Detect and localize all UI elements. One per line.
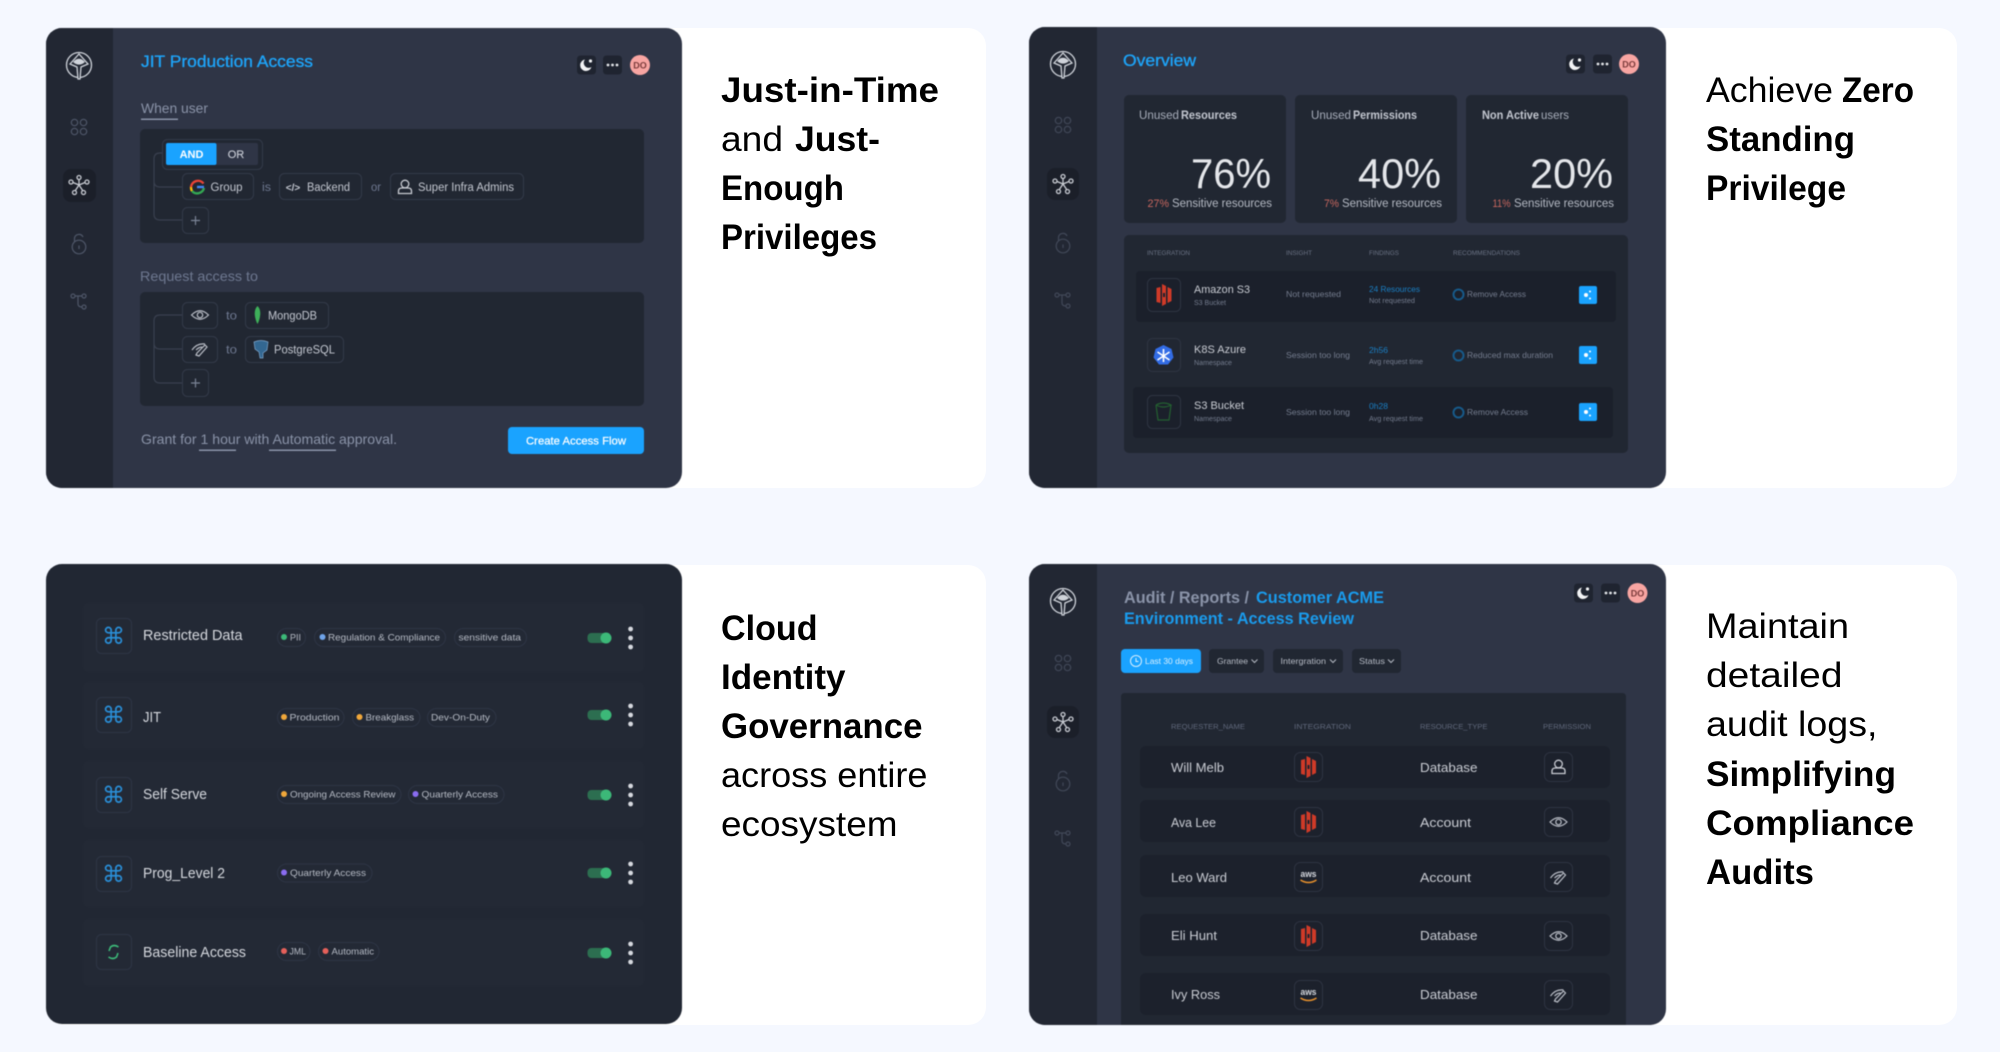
resource panel: MongoDB [268,310,317,322]
heading: JIT Production Access: JIT Production Access [141,53,313,71]
top actions [577,55,650,75]
top actions: DO [1631,588,1644,598]
stat card: unused resources: Sensitive resources [1172,198,1272,210]
row: S3 Bucket: S3 Bucket [1194,400,1244,412]
label: Request access to: Request access to [140,268,258,284]
row: Prog_Level 2 [83,840,644,907]
condition builder panel: is [262,182,271,194]
stat card: unused resources [1124,95,1286,223]
heading: Achieve Zero Standing Privilege [1706,71,1914,208]
sidebar icons [1047,588,1079,846]
row: K8S Azure: K8S Azure [1194,344,1246,356]
stat card: non active users: users [1541,110,1569,122]
heading: Maintain detailed audit logs, Simplifying Compliance Audits: Compliance [1706,804,1914,843]
row: JIT: Production [290,712,340,724]
condition builder panel: Group [210,182,242,194]
table header: INTEGRATION [1147,250,1190,257]
row: Ivy Ross: Ivy Ross [1171,987,1220,1002]
heading: Maintain detailed audit logs, Simplifying Compliance Audits: Maintain [1706,607,1849,646]
row: K8S Azure: Avg request time [1369,359,1423,366]
row: Baseline Access: Baseline Access [143,945,246,961]
condition builder panel: or [371,182,381,194]
heading: Just-in-Time and Just-Enough Privileges: Privileges [721,218,877,257]
row: Ivy Ross: Database [1420,987,1478,1002]
condition builder panel: </> [286,183,300,194]
stat card: unused resources: Unused [1139,110,1179,122]
row: S3 Bucket: Namespace [1194,416,1232,423]
row: Eli Hunt [1140,914,1610,956]
heading: Just-in-Time and Just-Enough Privileges: Just-in-Time [721,71,939,110]
row: Restricted Data: ⌘ [102,624,125,650]
white card [46,565,986,1025]
heading: Overview: Overview [1123,52,1196,70]
row: Prog_Level 2: Quarterly Access [290,868,366,879]
row: Amazon S3: S3 Bucket [1194,300,1226,307]
row: S3 Bucket: Avg request time [1369,416,1423,423]
row: Self Serve [83,761,644,828]
heading: Cloud Identity Governance across entire ecosystem: across entire [721,756,928,795]
heading: Cloud Identity Governance across entire ecosystem: Governance [721,707,922,746]
row: K8S Azure: 2h56 [1369,346,1389,355]
stat card: unused permissions: Permissions [1353,110,1417,122]
row: S3 Bucket: 0h28 [1369,402,1389,411]
stat card: unused permissions: 7% [1324,198,1339,210]
heading: Achieve Zero Standing Privilege: Standing [1706,120,1855,159]
heading: Just-in-Time and Just-Enough Privileges: Just- [795,120,880,159]
row: Ava Lee: Account [1420,815,1471,830]
row: Baseline Access: Automatic [332,946,374,958]
row: Self Serve: Quarterly Access [422,790,498,800]
sidebar icons [63,52,96,309]
white card [1029,28,1957,488]
row: Restricted Data: Restricted Data [143,628,243,644]
heading: Just-in-Time and Just-Enough Privileges: and [721,120,783,159]
row: Restricted Data: PII [290,632,301,644]
heading: Maintain detailed audit logs, Simplifying Compliance Audits: Simplifying [1706,755,1896,794]
condition builder panel: Backend [307,182,350,194]
stat card: non active users: Non Active [1482,110,1539,122]
row: Ivy Ross [1140,973,1610,1015]
table header: INTEGRATION [1294,724,1351,731]
resource panel: to [226,344,237,356]
row: JIT: Dev-On-Duty [431,712,490,724]
heading: breadcrumb: Audit / Reports / [1124,589,1249,607]
filter chips: Status [1359,656,1385,666]
row: Prog_Level 2: ⌘ [102,862,125,888]
resource panel [140,292,644,406]
row: JIT [83,682,644,749]
row: Prog_Level 2: Prog_Level 2 [143,866,225,882]
row: Ava Lee: Ava Lee [1171,815,1216,830]
heading: Cloud Identity Governance across entire ecosystem [721,609,928,844]
condition builder panel: Super Infra Admins [418,182,514,194]
stat card: unused resources: Resources [1181,110,1237,122]
grant sentence: Grant for 1 hour with Automatic approval. [141,431,397,447]
row: Amazon S3 [1136,271,1616,322]
button: Create Access Flow: Create Access Flow [526,436,626,448]
row: Self Serve: Ongoing Access Review [290,790,396,800]
heading: Cloud Identity Governance across entire ecosystem: Identity [721,658,846,697]
button: Create Access Flow [508,427,644,454]
condition builder panel [140,129,644,243]
screenshot: JIT production access [46,28,682,488]
heading: breadcrumb [1124,589,1384,628]
table header: FINDINGS [1369,250,1400,257]
panel: audit logs [1029,564,1957,1025]
white card [1029,565,1957,1025]
heading: Achieve Zero Standing Privilege: Privilege [1706,169,1846,208]
table header [1171,724,1591,731]
row: Will Melb: Will Melb [1171,760,1224,775]
filter chips: Grantee [1217,656,1248,666]
panel: cloud identity governance [46,564,986,1025]
screenshot: access rule list [46,564,682,1024]
stat card: unused permissions: Sensitive resources [1342,198,1442,210]
row: K8S Azure [1148,338,1597,372]
row: JIT: JIT [143,710,161,726]
heading: Achieve Zero Standing Privilege: Zero [1842,71,1914,110]
heading: Maintain detailed audit logs, Simplifying Compliance Audits [1706,607,1914,892]
row: Will Melb: Database [1420,760,1478,775]
heading: Cloud Identity Governance across entire ecosystem: Cloud [721,609,818,648]
heading: Maintain detailed audit logs, Simplifying Compliance Audits: audit logs, [1706,705,1878,744]
heading: Just-in-Time and Just-Enough Privileges: Enough [721,169,844,208]
row: S3 Bucket: Session too long [1286,407,1350,417]
row: Amazon S3: Not requested [1286,289,1341,299]
row: Amazon S3: 24 Resources [1369,285,1420,294]
screenshot: overview dashboard [1029,27,1666,488]
heading: Maintain detailed audit logs, Simplifying Compliance Audits: Audits [1706,853,1814,892]
table header: REQUESTER_NAME [1171,724,1245,731]
label: When user: When user [141,100,208,116]
row: JIT: ⌘ [102,703,125,729]
row: Baseline Access: JML [290,946,306,958]
row: Self Serve: ⌘ [102,783,125,809]
row: Leo Ward: Account [1420,870,1471,885]
table header [1147,250,1521,257]
row: Restricted Data: sensitive data [458,632,522,644]
filter chips: Last 30 days [1145,656,1193,666]
heading: Achieve Zero Standing Privilege: Achieve [1706,71,1833,110]
stat card: non active users: Sensitive resources [1514,198,1614,210]
row: JIT: Breakglass [366,712,414,724]
row: Baseline Access [83,919,644,986]
row: Leo Ward: Leo Ward [1171,870,1227,885]
screenshot: audit reports [1029,564,1666,1025]
top actions: DO [633,60,647,70]
heading: breadcrumb: Customer ACME [1256,589,1384,607]
table header: INSIGHT [1286,250,1312,257]
condition builder panel: OR [228,149,244,161]
white card [46,28,986,488]
heading: breadcrumb: Environment - Access Review [1124,610,1354,628]
heading: Cloud Identity Governance across entire ecosystem: ecosystem [721,805,898,844]
top actions [1574,583,1648,603]
table header: PERMISSION [1543,724,1591,731]
top actions: DO [1622,60,1636,70]
condition builder panel: AND [180,149,203,161]
panel: just-in-time privileges [46,28,986,488]
table header: RECOMMENDATIONS [1453,250,1521,257]
row: Amazon S3: Amazon S3 [1194,284,1250,296]
row: Eli Hunt: Eli Hunt [1171,928,1217,943]
stat card: unused permissions [1295,95,1457,223]
stat card: non active users: 11% [1492,198,1511,210]
row: Will Melb [1140,746,1610,788]
resource panel: to [226,310,237,322]
row: Restricted Data [83,603,644,672]
audit table [1121,693,1626,1025]
row: Ava Lee [1140,800,1610,842]
row: Amazon S3: Remove Access [1467,289,1526,299]
panel: zero standing privilege [1029,27,1957,488]
row: K8S Azure: Reduced max duration [1467,350,1553,360]
row: Self Serve: Self Serve [143,787,207,803]
row: K8S Azure: Session too long [1286,350,1350,360]
row: Eli Hunt: Database [1420,928,1478,943]
stat card: unused resources: 76% [1191,150,1271,197]
findings table [1124,235,1628,453]
row: Restricted Data: Regulation & Compliance [328,632,440,644]
row: S3 Bucket [1133,387,1613,438]
filter chips: Intergration [1280,656,1326,666]
table header: RESOURCE_TYPE [1420,724,1488,731]
row: Leo Ward [1140,855,1610,897]
sidebar icons [1047,52,1079,308]
heading: Just-in-Time and Just-Enough Privileges [721,71,939,257]
filter chips [1121,649,1401,673]
stat card: unused resources: 27% [1148,198,1169,210]
stat card: unused permissions: 40% [1358,150,1441,197]
row: S3 Bucket: Remove Access [1467,407,1528,417]
heading: Maintain detailed audit logs, Simplifying Compliance Audits: detailed [1706,656,1842,695]
stat card: unused permissions: Unused [1311,110,1351,122]
stat card: non active users: 20% [1530,150,1613,197]
top actions [1566,54,1639,74]
row: K8S Azure: Namespace [1194,360,1232,367]
resource panel: PostgreSQL [274,344,336,356]
row: Amazon S3: Not requested [1369,298,1415,305]
stat card: non active users [1466,95,1628,223]
